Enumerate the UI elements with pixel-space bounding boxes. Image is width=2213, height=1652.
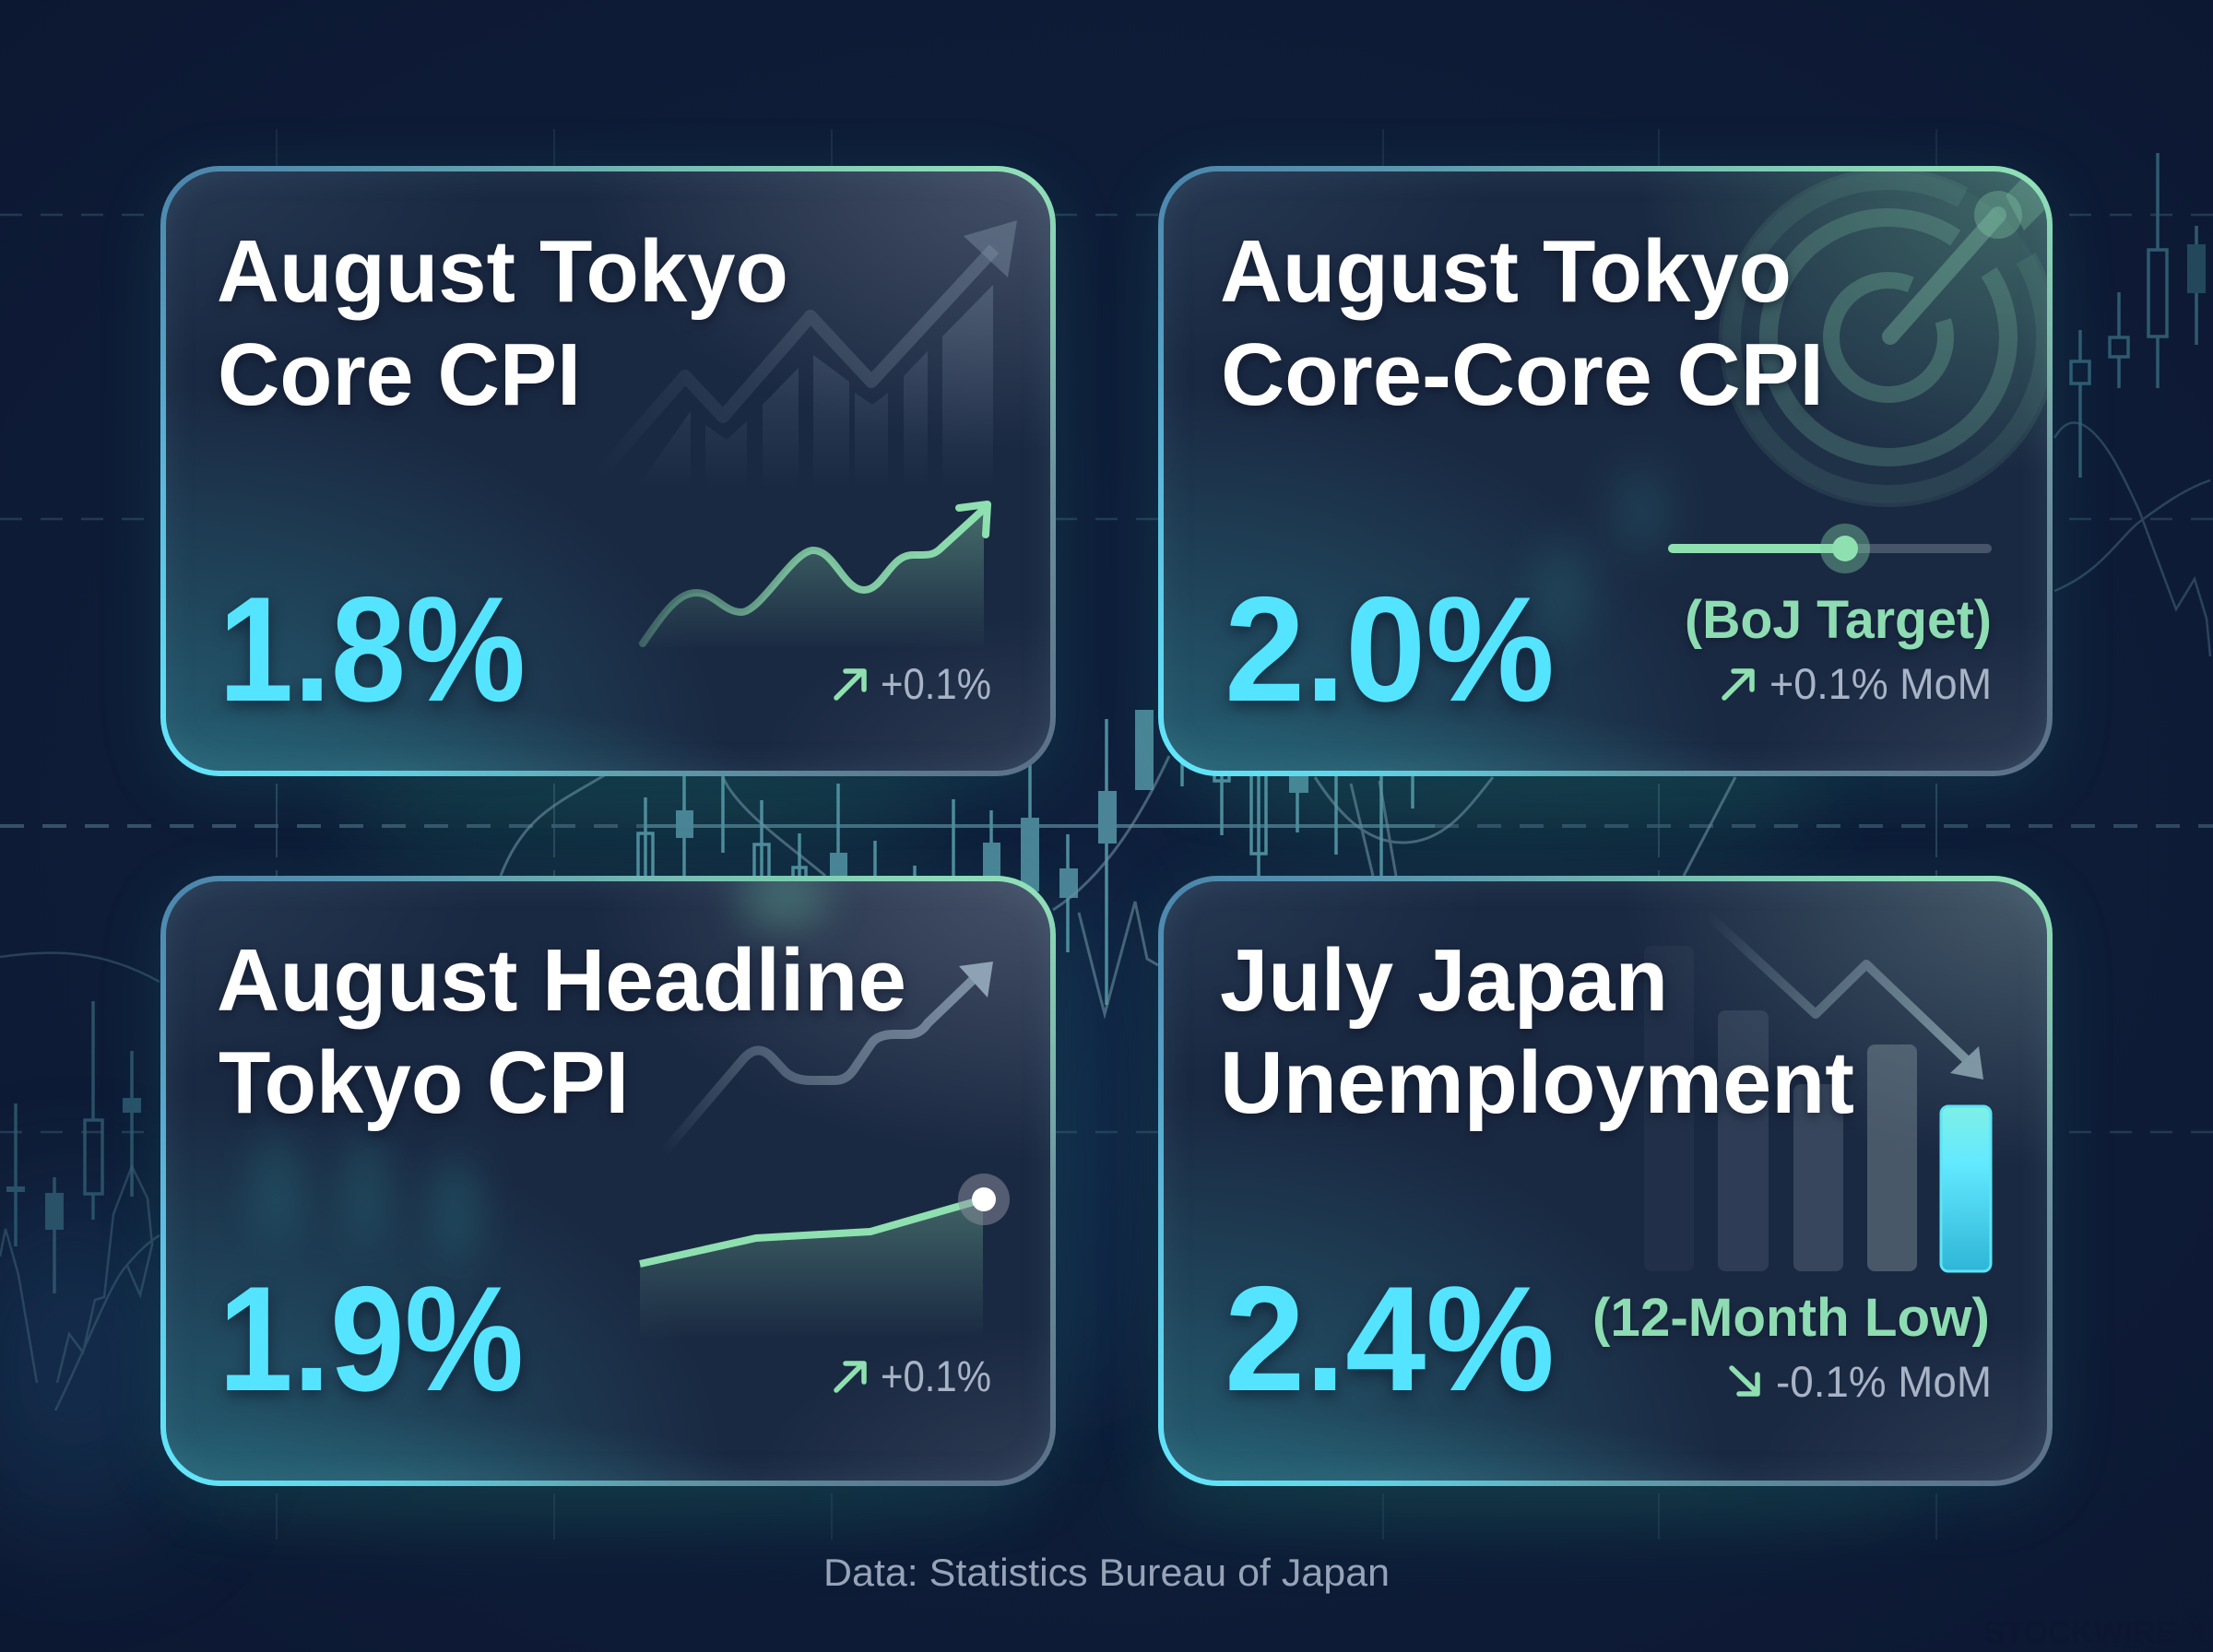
title [1220,931,1854,1132]
background icon: rising arrow line [663,962,993,1153]
sparkline chart [643,504,988,647]
centre candles [638,719,1413,1005]
background icon: target with arrow [1722,157,2070,503]
slider: BoJ target marker [1668,524,1992,573]
change: +0.1%: +0.1% [881,659,991,708]
title: Tokyo CPI [219,1033,629,1132]
change: -0.1% MoM: -0.1% MoM [1776,1357,1992,1406]
title: August Headline [217,931,906,1030]
panel: August Tokyo Core CPI [160,166,1056,776]
change: +0.1%: +0.1% [881,1351,991,1400]
title: August Tokyo [217,222,788,321]
bar chart: declining bars [1644,946,1991,1271]
title: Core CPI [218,325,581,424]
blurred glow behind panel [1537,466,1667,641]
change: +0.1% MoM: +0.1% MoM [1769,659,1992,708]
value: 1.8% [219,566,526,733]
panel: August Headline Tokyo CPI [160,876,1056,1486]
panel: August Tokyo Core-Core CPI [1158,166,2053,776]
title [1220,222,1824,424]
panel: July Japan Unemployment [1158,876,2053,1486]
right candles [2071,153,2206,478]
data source: Data: Statistics Bureau of Japan [823,1551,1390,1594]
falling arrow [1708,914,1983,1080]
label: 12-Month Low: (12-Month Low) [1592,1288,1990,1348]
change: +0.1% [836,1351,991,1400]
line chart with end marker [640,1174,1010,1337]
value: 2.0% [1225,566,1555,733]
label: BoJ Target: (BoJ Target) [1685,590,1992,650]
curves [501,756,1735,1014]
title: Core-Core CPI [1221,325,1824,424]
title: July Japan [1220,931,1668,1030]
change: +0.1% [836,659,991,708]
watermark: STOCKWIRE X [1983,1615,2207,1650]
title [217,222,788,424]
background icon: rising bars and arrow [600,220,1017,489]
title [217,931,906,1132]
left candles [6,1001,141,1293]
title: August Tokyo [1220,222,1792,321]
value: 2.4% [1225,1256,1555,1422]
value: 1.9% [219,1256,524,1422]
blurred glow behind panel [256,869,830,1263]
title: Unemployment [1220,1033,1854,1132]
